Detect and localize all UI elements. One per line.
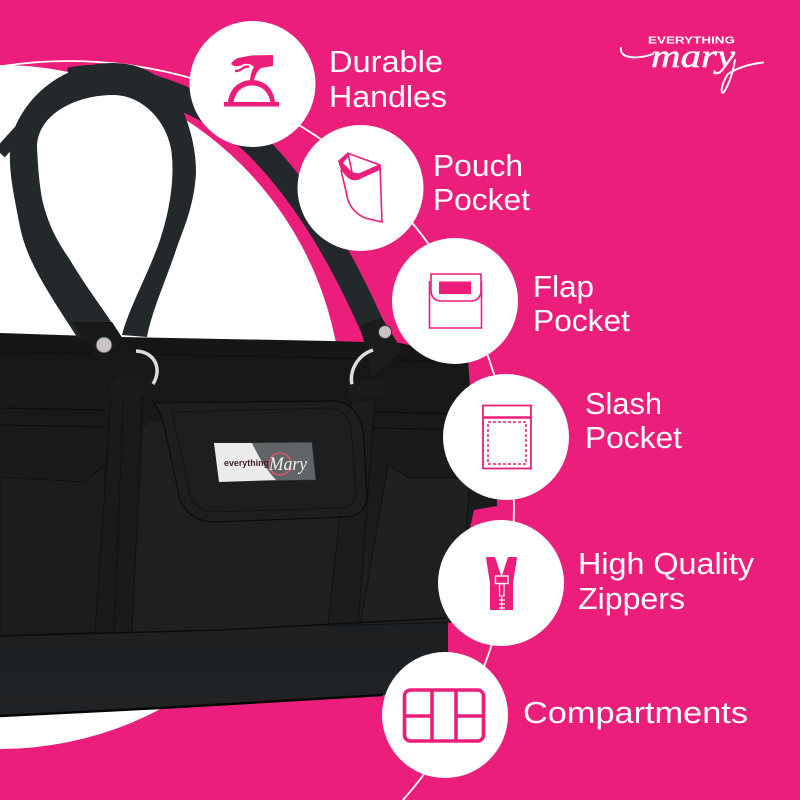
left pocket <box>0 465 105 636</box>
label: Pocket <box>533 304 631 338</box>
label: Compartments <box>523 696 748 730</box>
circle <box>298 125 424 251</box>
label: Durable <box>329 45 443 79</box>
label: Pocket <box>585 421 683 455</box>
bottom shadow edge <box>0 695 383 716</box>
icon: flap pocket <box>430 274 482 328</box>
right strap loop <box>348 378 385 400</box>
label <box>433 149 531 217</box>
label <box>533 270 631 338</box>
circle <box>443 374 569 500</box>
upper pocket band <box>0 408 470 430</box>
right rivet <box>378 326 392 338</box>
left strap loop <box>110 377 146 400</box>
feature: flap pocket <box>392 238 631 364</box>
label: Pocket <box>433 183 531 217</box>
thin connector arc <box>0 61 514 800</box>
label: High Quality <box>578 547 755 581</box>
feature: pouch pocket <box>298 125 531 251</box>
feature: high quality zippers <box>438 520 755 646</box>
circle <box>190 21 316 147</box>
icon: hand over bell <box>224 55 279 106</box>
icon: zipper <box>486 557 517 610</box>
feature: durable handles <box>190 21 447 147</box>
bag photo <box>0 63 497 716</box>
label <box>329 45 447 114</box>
right strap tab <box>360 318 402 378</box>
brand logo: mary <box>651 39 735 75</box>
circle <box>382 652 508 778</box>
circle <box>438 520 564 646</box>
white background circle <box>0 65 342 749</box>
right ring <box>351 350 373 385</box>
center-right strap <box>328 400 375 626</box>
pocket flap <box>154 401 367 522</box>
left ring <box>136 351 157 384</box>
label: Slash <box>585 387 662 421</box>
feature: slash pocket <box>443 374 683 500</box>
metal logo badge: Mary <box>268 454 308 475</box>
label <box>578 547 755 616</box>
label: Pouch <box>433 149 523 183</box>
metal logo badge: everything <box>224 458 269 469</box>
label: Flap <box>533 270 594 304</box>
label: Handles <box>329 80 447 114</box>
circle <box>392 238 518 364</box>
bag body <box>0 333 497 716</box>
brand logo: EVERYTHING <box>648 34 735 46</box>
icon: slash pocket <box>483 406 531 468</box>
center-left strap <box>95 385 143 633</box>
back handle of bag <box>0 77 378 340</box>
label <box>585 387 683 455</box>
label: Zippers <box>578 582 685 616</box>
center pocket <box>135 422 360 632</box>
metal logo badge <box>214 442 316 482</box>
right pocket <box>360 466 470 625</box>
icon: pouch <box>338 153 382 222</box>
top seam <box>0 352 470 362</box>
brand logo <box>621 34 763 93</box>
bottom band seam <box>0 618 446 636</box>
front handle of bag <box>10 63 196 337</box>
icon: compartment tray <box>404 690 484 741</box>
feature: compartments <box>382 652 748 778</box>
left rivet <box>96 337 112 353</box>
left strap tab <box>72 322 138 385</box>
